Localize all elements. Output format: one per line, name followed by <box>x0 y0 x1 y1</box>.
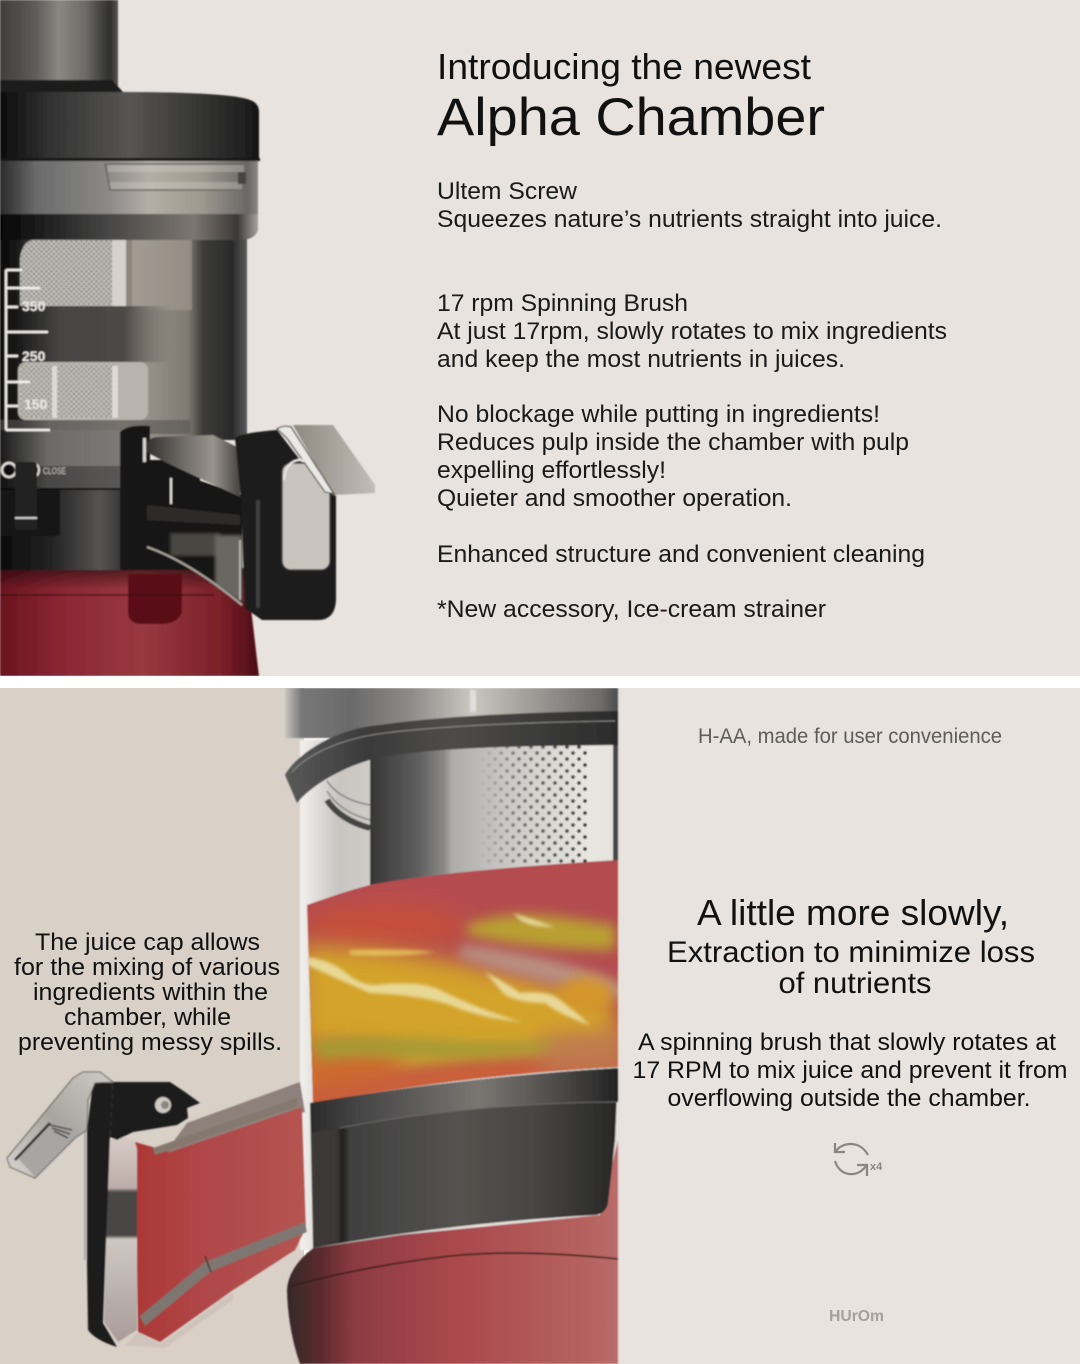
panel: bottom left background <box>0 688 304 1364</box>
text block: juice cap description: for the mixing of various <box>14 954 280 981</box>
open-close dial and label <box>2 462 66 530</box>
text block: juice cap description <box>14 929 282 1056</box>
text block: No blockage <box>437 401 909 512</box>
glass chamber <box>300 740 618 1250</box>
text block: Ultem Screw <box>437 178 942 233</box>
subtitle: H-AA made for user convenience: H-AA, made for user convenience <box>698 725 1002 748</box>
white divider between sections <box>0 676 1080 688</box>
heading: A little more slowly: A little more slowly, <box>697 892 1009 933</box>
text block: Enhanced structure: Enhanced structure and convenient cleaning <box>437 541 925 568</box>
text block: spinning brush description <box>632 1029 1068 1112</box>
text block: No blockage: Reduces pulp inside the chamber with pulp <box>437 429 909 456</box>
logo: Hurom: HUrOm <box>829 1308 884 1325</box>
upper rim of chamber <box>285 688 618 803</box>
juicer red base <box>0 568 259 676</box>
text block: juice cap description: preventing messy spills. <box>18 1029 282 1056</box>
text block: No blockage: Quieter and smoother operation. <box>437 485 792 512</box>
inner strainer <box>327 735 618 890</box>
text block: juice cap description: ingredients within the <box>33 979 268 1006</box>
dark inner band <box>12 306 172 362</box>
strainer mesh lower <box>18 362 148 420</box>
heading: Introducing the newest Alpha Chamber: Alpha Chamber <box>437 88 825 147</box>
red juice band <box>307 860 618 1103</box>
text block: spinning brush description: overflowing outside the chamber. <box>668 1085 1030 1112</box>
text block: 17 rpm Spinning Brush: 17 rpm Spinning Brush <box>437 290 688 317</box>
transparent chamber body <box>0 225 247 440</box>
silver lever <box>293 425 375 495</box>
text block: 17 rpm Spinning Brush <box>437 290 947 373</box>
icon: rotation arrows x4: x4 <box>870 1161 883 1173</box>
heading: Introducing the newest Alpha Chamber: Introducing the newest <box>437 46 811 87</box>
juice spout with cap <box>143 425 375 620</box>
dark bowl <box>310 1068 618 1248</box>
spout dark interior <box>145 462 242 605</box>
text block: No blockage: No blockage while putting in ingredients! <box>437 401 880 428</box>
juice swirl <box>300 903 625 1115</box>
silver plate <box>282 463 330 570</box>
text block: 17 rpm Spinning Brush: and keep the most nutrients in juices. <box>437 346 845 373</box>
lower dark collar <box>0 426 200 570</box>
text block: juice cap description: chamber, while <box>64 1004 231 1031</box>
measuring scale: 250 <box>22 348 46 364</box>
text block: new accessory: *New accessory, Ice-cream strainer <box>437 596 826 623</box>
measuring scale <box>6 270 50 430</box>
text block: spinning brush description: A spinning brush that slowly rotates at <box>638 1029 1056 1056</box>
upper transparent ring <box>0 157 258 240</box>
illustration: juicer cutaway with swirling juice <box>7 688 625 1364</box>
illustration: juicer chamber close-up <box>0 0 375 676</box>
heading: Introducing the newest Alpha Chamber <box>437 46 825 147</box>
measuring scale: 150 <box>24 396 48 412</box>
heading: A little more slowly: Extraction to minimize loss <box>667 936 1035 969</box>
text block: Ultem Screw: Squeezes nature’s nutrients straight into juice. <box>437 206 942 233</box>
heading: A little more slowly <box>667 892 1035 1000</box>
text block: No blockage: expelling effortlessly! <box>437 457 666 484</box>
top lid <box>0 92 260 161</box>
text block: spinning brush description: 17 RPM to mix juice and prevent it from <box>632 1057 1068 1084</box>
text block: 17 rpm Spinning Brush: At just 17rpm, slowly rotates to mix ingredients <box>437 318 947 345</box>
open-close dial and label: CLOSE <box>43 466 66 476</box>
text block: Ultem Screw: Ultem Screw <box>437 178 578 205</box>
spout glass tube <box>143 435 243 497</box>
lower red base <box>287 1140 618 1364</box>
strainer mesh upper <box>20 238 112 306</box>
heading: A little more slowly: of nutrients <box>778 967 932 1000</box>
juice outlet with red juice <box>104 1082 307 1348</box>
panel: top background <box>0 0 1080 676</box>
measuring scale: 350 <box>22 298 46 314</box>
icon: rotation arrows x4 <box>835 1143 883 1176</box>
text block: juice cap description: The juice cap allows <box>35 929 260 956</box>
silver lever <box>7 1072 113 1178</box>
black cap <box>84 1082 200 1347</box>
feed chute neck <box>0 0 123 92</box>
panel: bottom right background <box>618 688 1080 1364</box>
black cap <box>235 430 336 620</box>
